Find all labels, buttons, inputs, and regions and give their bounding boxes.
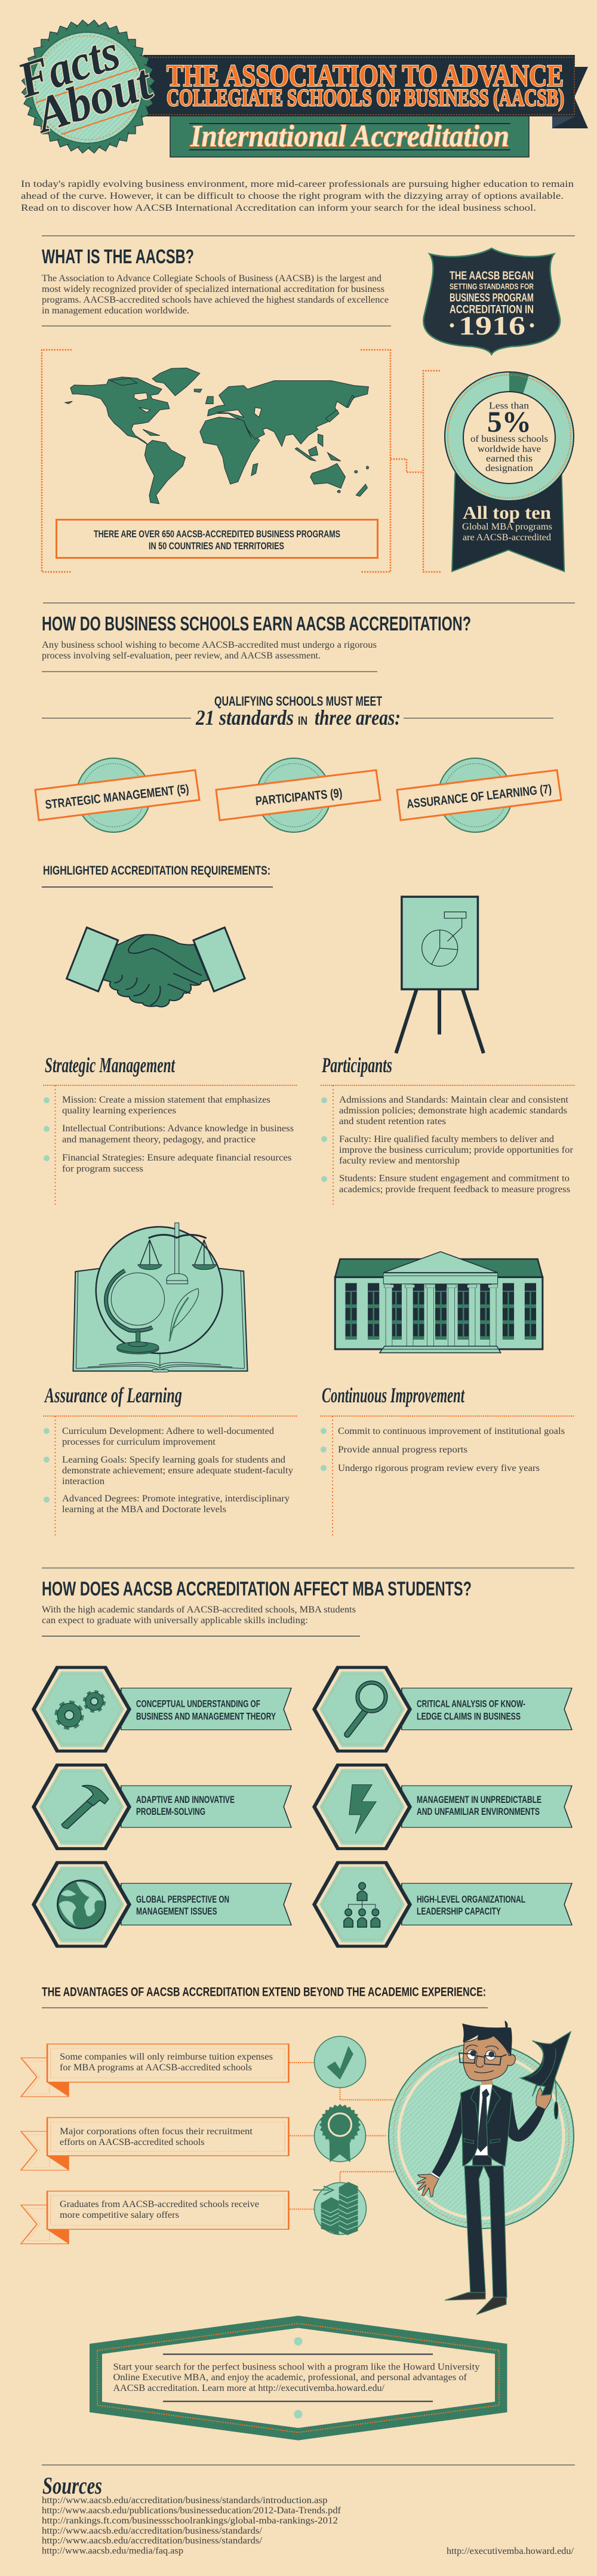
medal text: worldwide have	[478, 444, 541, 454]
banner text: Start your search for the perfect business school with a program like the Howard University	[113, 2362, 480, 2372]
badge: assurance of learning: ASSURANCE OF LEARNING (7)	[406, 782, 552, 811]
badge: strategic management	[35, 758, 199, 832]
shield text	[450, 270, 534, 340]
heading: 21 standards: 21 standards	[195, 706, 294, 730]
skill: conceptual understanding: CONCEPTUAL UNDERSTANDING OF	[136, 1698, 260, 1710]
badge disc	[32, 32, 143, 143]
intro paragraph: Read on to discover how AACSB International Accreditation can inform your search for the ideal business school.	[21, 203, 536, 213]
ribbon fold	[552, 116, 575, 128]
callout: tuition	[21, 2044, 288, 2097]
call to action banner	[90, 2316, 507, 2440]
shield shape	[423, 248, 560, 354]
heading: sources: Sources	[42, 2472, 102, 2499]
list text: quality learning experiences	[62, 1106, 176, 1116]
medal text: Less than	[489, 401, 529, 411]
text: AACSB description	[42, 273, 389, 316]
skill: adaptive problem solving: ADAPTIVE AND INNOVATIVE	[136, 1794, 235, 1805]
list text: demonstrate achievement; ensure adequate student-faculty	[62, 1466, 293, 1476]
shield: founded 1916	[423, 248, 560, 354]
dotted rules	[43, 1085, 298, 1086]
list text: and student retention rates	[339, 1116, 446, 1127]
medal centre	[463, 392, 555, 484]
skill: critical analysis	[312, 1666, 572, 1753]
text: AACSB description: The Association to Advance Collegiate Schools of Business (AACSB) is the largest and	[42, 273, 381, 284]
medal text: of business schools	[470, 434, 548, 444]
medal text: 5%	[487, 405, 531, 438]
list text: for program success	[62, 1164, 143, 1174]
bullets	[44, 1097, 50, 1103]
subtitle: International Accreditation	[190, 119, 509, 153]
connectors	[290, 2063, 394, 2209]
medal dotted ring	[448, 375, 571, 498]
panel: world map	[42, 350, 441, 572]
icon: rosette	[314, 2104, 365, 2162]
list text	[62, 1095, 294, 1174]
icon: handshake	[67, 928, 245, 1007]
list text: Learning Goals: Specify learning goals for students and	[62, 1455, 285, 1465]
badge starburst	[21, 20, 155, 153]
heading: highlighted requirements: HIGHLIGHTED ACCREDITATION REQUIREMENTS:	[43, 864, 270, 878]
list text	[338, 1426, 565, 1473]
list text	[339, 1095, 574, 1195]
callout: tuition: for MBA programs at AACSB-accredited schools	[60, 2063, 252, 2073]
medal text: designation	[485, 463, 533, 473]
callout: recruitment: efforts on AACSB-accredited schools	[60, 2137, 204, 2147]
intro paragraph: In today's rapidly evolving business environment, more mid-career professionals are pursuing higher education to remain	[21, 179, 574, 189]
icon: magnifier	[347, 1683, 386, 1734]
ribbon text: Global MBA programs	[462, 522, 552, 532]
skill: conceptual understanding	[32, 1666, 291, 1753]
header banner	[143, 55, 588, 157]
shield text: THE AACSB BEGAN	[450, 270, 534, 282]
list text: Faculty: Hire qualified faculty members to deliver and	[339, 1134, 554, 1144]
callout: salary: Graduates from AACSB-accredited schools receive	[60, 2199, 259, 2209]
skill: leadership capacity: HIGH-LEVEL ORGANIZATIONAL	[417, 1894, 525, 1905]
banner text	[113, 2362, 480, 2393]
skill: management in unpredictable environments	[312, 1764, 572, 1850]
skill: leadership capacity	[312, 1861, 572, 1948]
icon: org chart	[344, 1882, 380, 1927]
callout: salary	[21, 2191, 288, 2244]
dotted frame	[42, 350, 441, 572]
skill: adaptive problem solving: PROBLEM-SOLVING	[136, 1806, 205, 1817]
list text: Provide annual progress reports	[338, 1445, 467, 1455]
list text: and management theory, pedagogy, and practice	[62, 1134, 256, 1145]
list text: learning at the MBA and Doctorate levels	[62, 1504, 226, 1515]
shield text: 1916	[458, 311, 525, 340]
list text: Financial Strategies: Ensure adequate financial resources	[62, 1153, 291, 1163]
banner dots	[294, 2337, 302, 2346]
text: source list: http://www.aacsb.edu/accreditation/business/standards/	[42, 2536, 263, 2546]
skill: leadership capacity: LEADERSHIP CAPACITY	[417, 1906, 501, 1917]
text: source list: http://www.aacsb.edu/accreditation/business/standards/introduction.asp	[42, 2495, 328, 2506]
text: AACSB description: most widely recognized provider of specialized international accreditation for business	[42, 284, 384, 294]
icon: book with scales, globe and quill	[73, 1223, 248, 1372]
intro paragraph: ahead of the curve. However, it can be difficult to choose the right program with the dizzying array of options available.	[21, 191, 564, 201]
callout text: THERE ARE OVER 650 AACSB-ACCREDITED BUSINESS PROGRAMS	[94, 528, 340, 540]
legs and shoes	[445, 2166, 507, 2315]
list text: Admissions and Standards: Maintain clear and consistent	[339, 1095, 569, 1105]
skill: critical analysis: CRITICAL ANALYSIS OF KNOW-	[417, 1698, 525, 1710]
callout: salary: more competitive salary offers	[60, 2210, 179, 2220]
badge: Facts About	[11, 20, 159, 153]
shield text: BUSINESS PROGRAM	[450, 292, 534, 304]
list text: Advanced Degrees: Promote integrative, interdisciplinary	[62, 1494, 290, 1504]
subtitle rules	[189, 124, 510, 150]
list text: Curriculum Development: Adhere to well-documented	[62, 1426, 274, 1436]
medal: 5 percent	[445, 372, 574, 571]
list text: Commit to continuous improvement of institutional goals	[338, 1426, 565, 1436]
text: source list: http://www.aacsb.edu/media/faq.asp	[42, 2546, 183, 2556]
callout: recruitment: Major corporations often focus their recruitment	[60, 2126, 253, 2137]
graduate illustration	[389, 2021, 574, 2315]
panel: strategic management	[43, 1053, 298, 1206]
callout text: IN 50 COUNTRIES AND TERRITORIES	[149, 540, 284, 552]
icon: checkmark	[314, 2036, 365, 2088]
heading: What is the AACSB: WHAT IS THE AACSB?	[42, 245, 194, 267]
list text: faculty review and mentorship	[339, 1156, 460, 1166]
Facts: Facts	[11, 24, 126, 109]
text: source list	[42, 2495, 341, 2556]
list text: interaction	[62, 1476, 104, 1486]
panel: continuous improvement	[320, 1383, 575, 1536]
heading: 21 standards	[42, 694, 553, 730]
skill: management in unpredictable environments: MANAGEMENT IN UNPREDICTABLE	[417, 1794, 541, 1805]
medal text: earned this	[486, 454, 533, 464]
medal text	[470, 401, 548, 473]
banner rules	[163, 2355, 433, 2401]
text: process	[42, 640, 377, 661]
list text: Students: Ensure student engagement and commitment to	[339, 1174, 570, 1183]
callout: tuition: Some companies will only reimburse tuition expenses	[60, 2052, 273, 2062]
medal ring	[445, 372, 574, 501]
badge: participants: PARTICIPANTS (9)	[255, 786, 343, 808]
skill: management in unpredictable environments: AND UNFAMILIAR ENVIRONMENTS	[417, 1806, 540, 1817]
callout box	[56, 519, 377, 558]
text: AACSB description: in management education worldwide.	[42, 306, 189, 316]
skill: global perspective	[32, 1861, 291, 1948]
skill: conceptual understanding: BUSINESS AND MANAGEMENT THEORY	[136, 1711, 276, 1722]
medal wedge	[509, 373, 529, 436]
backdrop dotted ring	[393, 2048, 569, 2224]
banner frame	[90, 2316, 507, 2440]
text: skills intro	[42, 1605, 356, 1626]
ribbon text	[462, 502, 552, 543]
icon: gears	[57, 1692, 104, 1728]
intro paragraph	[21, 179, 574, 213]
ribbon tail	[552, 67, 588, 128]
ribbon text: are AACSB-accredited	[463, 533, 551, 543]
panel: participants	[321, 1053, 576, 1206]
list text: processes for curriculum improvement	[62, 1437, 216, 1447]
text: AACSB description: programs. AACSB-accredited schools have achieved the highest standards of excellence	[42, 295, 389, 305]
icon: lightning bolt	[349, 1784, 376, 1834]
list text: admission policies; demonstrate high academic standards	[339, 1106, 567, 1116]
skill: global perspective: GLOBAL PERSPECTIVE ON	[136, 1894, 229, 1905]
icon: globe	[57, 1881, 106, 1928]
banner text: AACSB accreditation. Learn more at http://executivemba.howard.edu/	[113, 2383, 385, 2393]
panel title: Strategic Management	[45, 1053, 176, 1077]
text: skills intro: can expect to graduate with universally applicable skills including:	[42, 1615, 308, 1626]
text: site link: http://executivemba.howard.edu/	[447, 2546, 574, 2556]
panel: assurance of learning	[43, 1383, 298, 1536]
banner interior	[102, 2328, 495, 2428]
panel title: Assurance of Learning	[44, 1383, 182, 1407]
panel title: Continuous Improvement	[322, 1383, 465, 1407]
badge dashed ring	[35, 36, 139, 140]
list text	[62, 1426, 293, 1515]
list text: Mission: Create a mission statement that emphasizes	[62, 1095, 270, 1105]
banner stitching	[147, 57, 574, 115]
bullets	[321, 1428, 327, 1434]
shield text: ACCREDITATION IN	[450, 303, 534, 316]
shield text: SETTING STANDARDS FOR	[450, 282, 534, 291]
callout: recruitment	[21, 2118, 288, 2170]
main banner	[143, 55, 575, 116]
dotted rules	[321, 1085, 576, 1086]
ribbon text: All top ten	[463, 502, 551, 523]
About: About	[27, 54, 159, 144]
icon: money stacks	[313, 2182, 367, 2235]
heading: 21 standards: IN	[298, 715, 307, 728]
text: source list: http://www.aacsb.edu/publications/businesseducation/2012-Data-Trends.pdf	[42, 2506, 341, 2516]
heading: 21 standards: three areas:	[315, 706, 401, 730]
icon: presentation easel	[396, 897, 484, 1053]
subtitle box	[170, 113, 529, 157]
bullets	[321, 1097, 327, 1103]
medal ribbon	[452, 473, 564, 571]
banner stitching	[97, 2323, 499, 2432]
skill: adaptive problem solving	[32, 1764, 291, 1850]
badge: strategic management: STRATEGIC MANAGEMENT (5)	[44, 782, 190, 812]
dotted rules	[43, 1415, 298, 1417]
banner text: Online Executive MBA, and enjoy the academic, professional, and personal advantages of	[113, 2372, 467, 2383]
badge: assurance of learning	[397, 758, 561, 832]
dotted rules	[320, 1415, 575, 1417]
badge: participants	[216, 758, 380, 832]
text: process: Any business school wishing to become AACSB-accredited must undergo a rigorous	[42, 640, 377, 650]
text: process: process involving self-evaluation, peer review, and AACSB assessment.	[42, 651, 321, 661]
text: skills intro: With the high academic standards of AACSB-accredited schools, MBA students	[42, 1605, 356, 1615]
backdrop ring	[399, 2054, 564, 2218]
text: source list: http://rankings.ft.com/businessschoolrankings/global-mba-rankings-2012	[42, 2516, 338, 2526]
list text: Undergo rigorous program review every five years	[338, 1463, 540, 1473]
callout text	[94, 528, 340, 552]
graduate backdrop circle	[389, 2043, 574, 2229]
text: source list: http://www.aacsb.edu/accreditation/business/standards/	[42, 2526, 263, 2536]
list text: Intellectual Contributions: Advance knowledge in business	[62, 1124, 294, 1134]
heading: 21 standards: QUALIFYING SCHOOLS MUST MEET	[214, 694, 382, 709]
skill: critical analysis: LEDGE CLAIMS IN BUSINESS	[417, 1711, 521, 1722]
world map	[64, 368, 368, 504]
icon: university building	[335, 1252, 543, 1353]
list text: improve the business curriculum; provide opportunities for	[339, 1145, 574, 1155]
icon: hammer	[61, 1785, 109, 1829]
panel title: Participants	[321, 1053, 392, 1077]
bullets	[44, 1428, 50, 1434]
graduate upper body	[417, 2021, 571, 2197]
badge stripes	[36, 68, 137, 134]
skill: global perspective: MANAGEMENT ISSUES	[136, 1906, 217, 1917]
list text: academics; provide frequent feedback to measure progress	[339, 1184, 570, 1195]
